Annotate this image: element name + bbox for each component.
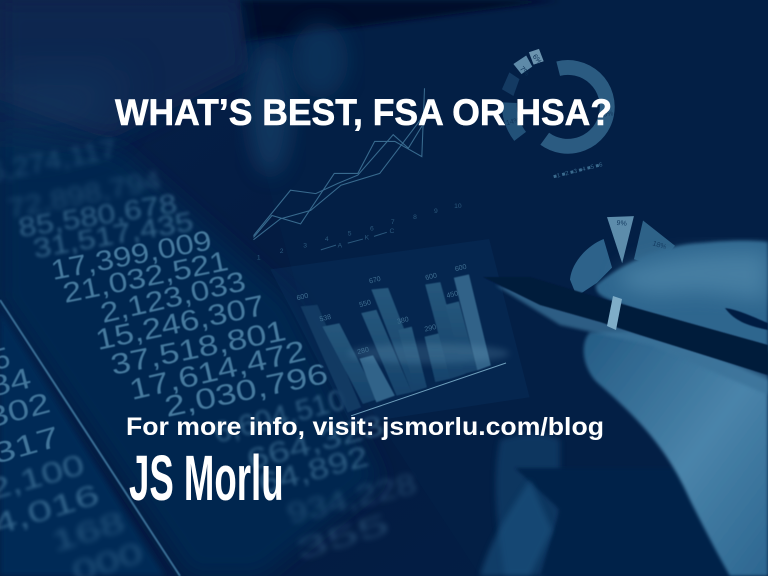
line chart axis labels: 2: [280, 248, 284, 255]
bar chart value labels: 550: [359, 299, 372, 309]
bar chart value labels: 380: [396, 316, 410, 326]
pen highlight: [495, 285, 768, 395]
finger nail shadow: [725, 308, 768, 330]
shadow hand lower centre: [496, 433, 560, 576]
number column: financial table: 6,604,510: [211, 384, 349, 450]
pen barrel: [483, 277, 768, 375]
pie chart: [570, 216, 675, 296]
pen ring: [607, 296, 622, 330]
number column: financial table: 85,580,678: [16, 188, 179, 243]
bar chart value labels: 290: [424, 324, 437, 334]
title: WHAT’S BEST, FSA OR HSA?: [115, 92, 612, 133]
line chart axis labels: 3: [303, 242, 307, 249]
line chart axis labels: 10: [454, 203, 462, 210]
donut chart: 14%: [505, 117, 522, 127]
number column: financial table: 72,898,794: [5, 165, 163, 224]
donut chart: 35%: [599, 110, 615, 119]
number column: financial table: 31,517,435: [31, 206, 196, 264]
number column: financial table: [0, 134, 420, 567]
hand holding pen: [480, 241, 768, 576]
bar chart panel: [270, 239, 530, 424]
divider line between number columns: [0, 300, 180, 576]
line chart axis labels: [257, 203, 462, 261]
upper fingers: [596, 241, 768, 352]
line chart axis labels: 9: [434, 208, 438, 215]
bar chart value labels: 600: [454, 264, 467, 273]
number column: financial table: 2,123,033: [97, 265, 249, 329]
bar chart value labels: [296, 264, 467, 356]
bar chart value labels: 538: [319, 314, 332, 323]
line chart: [253, 88, 425, 240]
line chart axis labels: 1: [257, 254, 261, 261]
donut legend: ■1 ■2 ■3 ■4 ■5 ■6: [553, 162, 604, 180]
bar chart value labels: 450: [446, 290, 459, 300]
number column: financial table: 37,518,801: [108, 315, 289, 382]
bar chart baseline: [351, 363, 506, 416]
number column: left page: [0, 342, 147, 576]
number column: financial table: 2,030,796: [162, 358, 331, 424]
number column: financial table: 17,614,472: [126, 335, 309, 407]
line chart axis labels: K: [365, 235, 370, 242]
charts on the tablet: [253, 49, 675, 424]
bar chart value labels: 280: [357, 346, 370, 356]
line chart axis labels: C: [389, 228, 394, 235]
line chart axis labels: 5: [348, 231, 352, 238]
number column: financial table: 15,246,307: [93, 290, 268, 357]
logo wordmark: JS Morlu: [129, 444, 284, 515]
number column: financial table: 355: [293, 508, 393, 567]
donut chart: 6%: [531, 53, 543, 66]
number column: financial table: 17,399,009: [48, 224, 214, 286]
line chart axis labels: 7: [391, 219, 395, 226]
line chart axis labels: 6: [370, 225, 374, 232]
line chart axis labels: 4: [325, 236, 329, 243]
bar chart value labels: 600: [425, 272, 438, 282]
donut chart: 7%: [518, 65, 531, 78]
donut chart: [502, 49, 615, 146]
number column: financial table: 934,228: [284, 468, 420, 531]
number column: left page: 168: [48, 506, 129, 559]
lower finger and palm: [584, 332, 768, 576]
subtitle link: For more info, visit: jsmorlu.com/blog: [126, 413, 604, 441]
pie chart: 9%: [616, 220, 628, 228]
bar chart: [301, 274, 491, 412]
number column: financial table: 664,323: [244, 410, 387, 477]
bar chart value labels: 670: [368, 276, 382, 285]
bar chart reflection: [348, 343, 509, 364]
line chart axis labels: 8: [413, 214, 417, 221]
line chart axis labels: A: [338, 242, 343, 249]
number column: financial table: 21,032,521: [60, 245, 231, 309]
bar chart value labels: 600: [296, 293, 309, 302]
pie chart: 18%: [652, 240, 668, 252]
number column: financial table: 64,892: [256, 441, 372, 501]
